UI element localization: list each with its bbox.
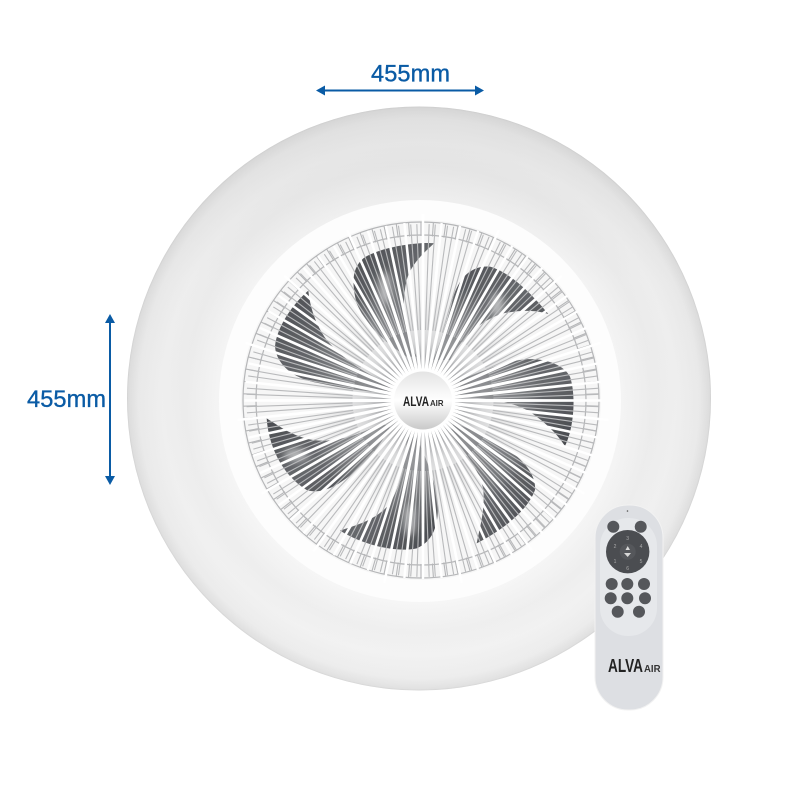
fan hub with logo (391, 368, 455, 432)
fan hub with logo: ALVA (403, 394, 429, 409)
dimension: width: 455mm (371, 62, 450, 88)
grille ladder ticks (237, 216, 605, 584)
remote dial: 1 (614, 559, 617, 565)
remote dial: 6 (626, 566, 629, 572)
fan grille background (241, 220, 601, 580)
remote control (595, 505, 663, 710)
blade highlights (284, 272, 503, 536)
fan outer ring (127, 106, 711, 690)
remote dial (606, 530, 649, 573)
remote dial: 4 (640, 544, 643, 550)
remote dial: 3 (626, 536, 629, 542)
remote logo: ALVA (608, 656, 643, 676)
grille rings (243, 222, 599, 578)
remote buttons (605, 521, 651, 618)
fan hub with logo: AIR (430, 398, 444, 408)
remote dial: 5 (640, 559, 643, 565)
fan inner white bezel (219, 200, 621, 602)
remote indicator (627, 510, 628, 512)
hub surround shadow (303, 280, 543, 520)
dimension: height: 455mm (27, 387, 106, 413)
fan blades (267, 243, 574, 550)
remote body (595, 505, 663, 710)
dimension: height (27, 314, 115, 485)
remote dial: 2 (614, 544, 617, 550)
remote logo: AIR (644, 664, 661, 675)
remote button panel (600, 518, 657, 636)
grille spokes (228, 203, 621, 597)
dimension: width (316, 62, 484, 96)
